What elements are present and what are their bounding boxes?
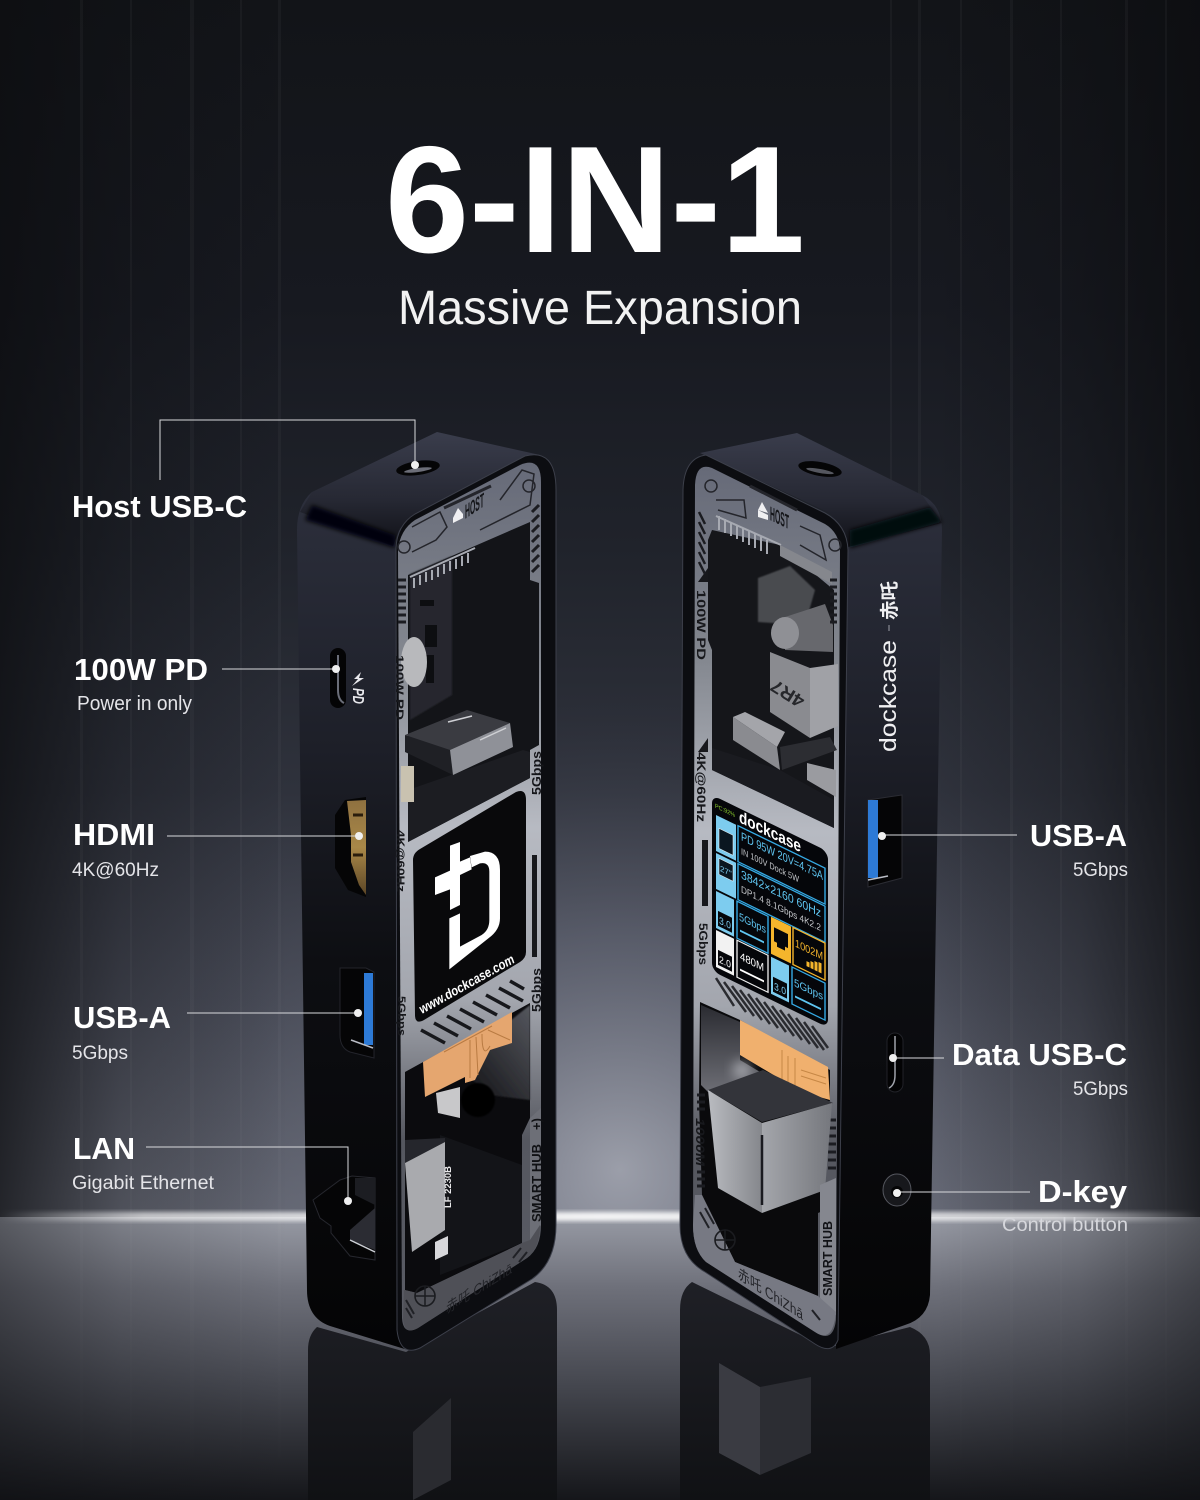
label: USB-A left: USB-A	[73, 1000, 171, 1035]
right hub top face	[700, 433, 942, 547]
subtitle: Massive Expansion	[398, 282, 802, 335]
left hub rear wall	[455, 1005, 530, 1100]
screen row 2 readout: 3842×2160 60Hz	[741, 868, 821, 920]
right hub strip ticks	[697, 1095, 705, 1186]
device: left hub	[297, 432, 556, 1350]
screen row 2 icon	[716, 853, 736, 899]
screen row 2 readout: DP1.4 8.1Gbps 4K2.2	[741, 885, 821, 934]
sublabel: 4K@60Hz: 4K@60Hz	[72, 860, 159, 881]
sublabel: Power in only: Power in only	[77, 693, 192, 715]
port: right hub USB-A	[868, 795, 902, 887]
right hub brand divider	[888, 625, 890, 631]
right hub screen hatch	[716, 978, 828, 1050]
callout: D-key	[893, 1174, 1128, 1236]
right hub platform	[712, 748, 834, 828]
screen row 4 USB 2.0 speed: 480M	[740, 950, 764, 974]
left hub lower window	[405, 1003, 530, 1293]
screen row 1 icon	[716, 815, 736, 861]
left hub strip text SMART HUB: SMART HUB	[529, 1144, 544, 1222]
left hub strip text 4K: 4K@60Hz	[394, 830, 406, 893]
left hub hatch stripes	[532, 505, 539, 572]
screen row 4 USB 3.0 icon	[771, 957, 789, 1003]
right hub edge ticks	[828, 580, 837, 1168]
left hub strip text 5Gbps: 5Gbps	[395, 996, 407, 1036]
left hub HOST icon	[453, 508, 463, 523]
screen row 3 USB icon	[716, 891, 734, 937]
label: D-key: D-key	[1038, 1174, 1128, 1209]
left hub front bezel	[396, 455, 556, 1350]
right hub brand CJK: 赤吒	[879, 581, 901, 620]
right hub strip text 100W PD: 100W PD	[694, 590, 706, 660]
label: Host USB-C: Host USB-C	[72, 489, 247, 524]
screen row 1 readout	[738, 826, 825, 904]
sublabel: Gigabit Ethernet: Gigabit Ethernet	[72, 1173, 215, 1194]
right hub strip hatch	[699, 512, 705, 574]
screen header green: PC:92%	[715, 803, 735, 819]
left hub side face	[297, 492, 408, 1350]
left hub top panel marks	[398, 470, 535, 553]
left hub small logo mark: +)	[529, 1118, 544, 1130]
floor reflection: left device	[308, 1282, 557, 1500]
port: right hub D-key	[883, 1174, 911, 1206]
right hub lower window	[699, 1002, 830, 1296]
port: right hub top USB-C	[797, 458, 843, 480]
port marking PD: PD	[349, 688, 366, 704]
sublabel: Control button: Control button	[1002, 1215, 1128, 1236]
right hub HOST icon	[758, 502, 768, 520]
website text: www.dockcase.com	[416, 952, 517, 1017]
left hub top edge highlight	[305, 505, 395, 548]
port: left hub LAN	[313, 1176, 375, 1260]
callout: USB-A right	[878, 818, 1128, 881]
left hub small chip	[435, 1236, 448, 1260]
left hub platform	[408, 750, 530, 842]
dockcase logo mark	[435, 842, 500, 969]
left hub comb detail	[410, 548, 475, 588]
port: left hub HDMI	[335, 797, 366, 897]
screen brand: dockcase	[739, 807, 801, 856]
right hub ChiZha mark: 赤吒 ChiZhā	[738, 1264, 804, 1324]
left hub PCB	[410, 556, 452, 720]
screen row 2 icon: 27"	[720, 863, 732, 879]
callout: LAN	[72, 1131, 352, 1205]
right hub bottom band	[693, 1195, 836, 1335]
right hub LCD screen	[712, 794, 828, 1028]
device: right hub: HOST	[770, 503, 789, 534]
port: right hub Data USB-C	[887, 1033, 903, 1092]
left hub grey frame	[398, 463, 541, 1330]
left hub right slit	[532, 855, 537, 957]
left hub left strip tick marks	[398, 580, 406, 622]
left hub ChiZha mark: 赤吒 ChiZhā	[446, 1260, 513, 1318]
port: left hub USB-C PD	[330, 648, 346, 708]
left hub strip text SMART HUB	[529, 1108, 544, 1240]
right hub strip arrow	[698, 568, 708, 752]
left hub orange flex cable	[423, 1012, 512, 1097]
right hub side slit	[702, 840, 708, 906]
sublabel: 5Gbps right: 5Gbps	[1073, 860, 1128, 881]
screen row 4 USB 3.0 speed	[792, 967, 825, 1020]
left hub 5Gbps lower: 5Gbps	[529, 968, 544, 1012]
screen row 4 USB 2.0 icon: 2.0	[719, 954, 731, 971]
screen row 3 USB speed	[737, 901, 768, 953]
left hub speaker bump	[461, 1083, 495, 1117]
label: HDMI: HDMI	[73, 817, 155, 852]
callout: Data USB-C	[889, 1037, 1128, 1100]
right hub USB plug	[733, 712, 837, 770]
left hub white socket	[436, 1087, 460, 1118]
left hub LAN metal	[405, 1138, 445, 1252]
screen LAN speed	[793, 928, 825, 980]
screen row 4 USB 3.0 icon: 3.0	[774, 981, 786, 998]
right hub strip text 5Gbps: 5Gbps	[696, 923, 708, 965]
callout: USB-A left	[72, 1000, 362, 1064]
right hub strip text SMART HUB	[820, 1178, 836, 1315]
left hub black label	[413, 791, 526, 1022]
right hub strip text 1000M: 1000M	[693, 1118, 707, 1167]
right hub capacitor	[771, 604, 833, 652]
sublabel: 5Gbps data: 5Gbps	[1073, 1079, 1128, 1100]
left hub upper window	[408, 522, 539, 842]
left hub white connector	[401, 766, 414, 802]
callout: Host USB-C	[72, 420, 419, 524]
right hub inductor 4R7	[767, 652, 838, 738]
callout: HDMI	[72, 817, 363, 881]
screen row 1 readout: PD 95W 20V=4.75A	[741, 830, 823, 883]
right hub grey block	[807, 763, 836, 797]
right hub top panel marks	[705, 480, 841, 560]
title: 6-IN-1	[385, 115, 805, 285]
screen row 4 USB 2.0 icon	[716, 930, 734, 976]
right hub LAN metal box	[708, 1070, 833, 1213]
right hub inductor 4R7: 4R7	[767, 676, 808, 712]
port: left hub USB-A	[340, 968, 374, 1058]
port: left hub top USB-C	[395, 458, 441, 478]
callout: 100W PD	[74, 652, 340, 715]
right hub strip text 4K: 4K@60Hz	[694, 752, 706, 822]
right hub orange flex cable	[740, 1020, 830, 1100]
right hub grey frame	[693, 467, 840, 1336]
screen row 1 readout: IN 100V Dock 5W	[741, 847, 799, 885]
right hub side face	[836, 495, 942, 1349]
left hub strip text 100W PD: 100W PD	[393, 655, 405, 720]
right hub top edge highlight	[850, 507, 942, 548]
label: USB-A right: USB-A	[1030, 818, 1127, 853]
screen LAN speed: 1002M	[795, 937, 823, 963]
right hub front bezel	[680, 455, 848, 1349]
right hub bar	[780, 545, 832, 584]
screen row 2 readout	[738, 864, 825, 942]
label: LAN: LAN	[73, 1131, 135, 1166]
floor reflection: right device	[680, 1282, 930, 1500]
right hub rear connector	[758, 566, 815, 625]
left hub top face	[300, 432, 540, 546]
right hub strip text SMART HUB: SMART HUB	[820, 1221, 835, 1296]
right hub rear wall	[701, 1005, 790, 1092]
right hub brand text: dockcase	[875, 640, 901, 752]
device: left hub: HOST	[465, 488, 484, 524]
port marking bolt	[352, 672, 364, 686]
left hub bottom band	[403, 1225, 540, 1330]
screen row 4 USB 2.0 speed	[737, 940, 768, 992]
left hub chip text: LF 2230B	[443, 1166, 454, 1208]
screen row 4 USB 3.0 speed: 5Gbps	[794, 977, 823, 1003]
sublabel: 5Gbps left: 5Gbps	[72, 1043, 128, 1064]
label: Data USB-C: Data USB-C	[952, 1037, 1127, 1072]
screen LAN icon	[771, 917, 791, 964]
device: right hub	[680, 433, 942, 1349]
left hub label hatch	[421, 981, 524, 1043]
left hub USB plug	[405, 710, 513, 775]
label: 100W PD: 100W PD	[74, 652, 208, 687]
right hub upper window	[708, 530, 834, 828]
right hub wall glow	[733, 1061, 751, 1079]
left hub lower interior	[440, 1135, 522, 1275]
screen row 3 USB icon: 3.0	[719, 915, 731, 932]
screen row 3 USB speed: 5Gbps	[739, 911, 766, 936]
left hub PCB chips	[420, 600, 437, 683]
right hub comb detail	[716, 516, 781, 554]
left hub capacitor	[401, 637, 427, 687]
left hub 5Gbps upper: 5Gbps	[529, 751, 544, 795]
